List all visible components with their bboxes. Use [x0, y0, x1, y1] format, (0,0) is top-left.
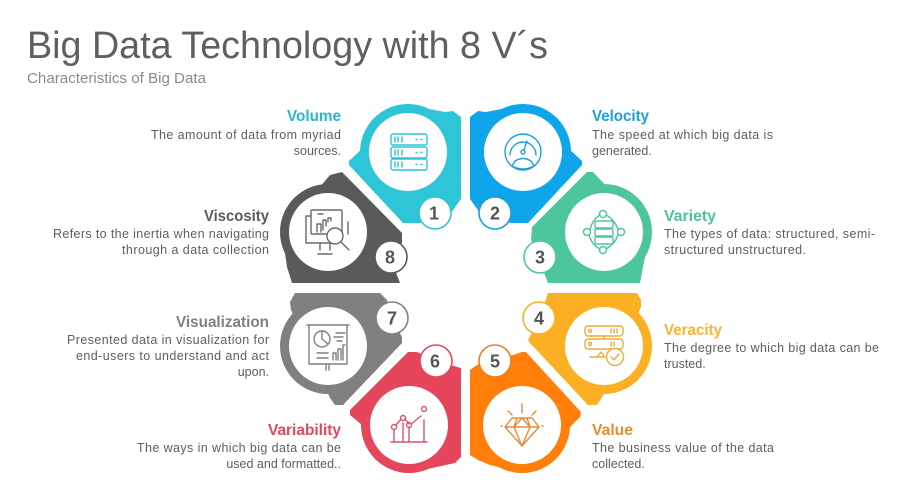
- panel: viscosity: [280, 172, 407, 283]
- text: volume: The amount of data from myriad: [151, 128, 341, 142]
- text: veracity: The degree to which big data can be: [664, 341, 879, 355]
- text: variety: [664, 208, 875, 257]
- panel: volume: 1: [429, 204, 439, 224]
- panel: visualization: 7: [387, 308, 397, 328]
- text: visualization: upon.: [238, 365, 269, 379]
- panel: variability: [350, 345, 461, 473]
- text: value: The business value of the data: [592, 441, 774, 455]
- text: variability: [137, 422, 341, 471]
- panel: volume: [349, 104, 461, 229]
- text: variability: Variability: [268, 422, 341, 439]
- icon: server stack: [391, 134, 427, 170]
- text: velocity: Velocity: [592, 108, 649, 125]
- text: value: collected.: [592, 457, 645, 471]
- text: viscosity: [53, 208, 269, 257]
- panel: velocity: 2: [490, 204, 500, 224]
- panel: velocity: [470, 104, 582, 229]
- text: variety: structured unstructured.: [664, 243, 806, 257]
- subtitle: Characteristics of Big Data: [27, 71, 207, 87]
- text: visualization: [67, 314, 270, 379]
- text: veracity: trusted.: [664, 357, 706, 371]
- panel: visualization: [280, 293, 408, 405]
- icon: line chart: [391, 406, 427, 442]
- icon: server check: [585, 326, 624, 366]
- text: value: [592, 422, 774, 471]
- icon: connected database: [584, 210, 624, 254]
- panel: variability: 6: [430, 352, 440, 372]
- icon: presentation board: [307, 325, 349, 370]
- text: volume: sources.: [294, 144, 341, 158]
- text: variability: used and formatted..: [226, 457, 341, 471]
- text: variety: The types of data: structured, semi-: [664, 227, 875, 241]
- text: visualization: Visualization: [176, 314, 269, 331]
- icon: monitor with magnifier: [306, 210, 349, 254]
- title: Big Data Technology with 8 V´s: [27, 25, 548, 67]
- text: veracity: [664, 322, 879, 371]
- text: viscosity: Refers to the inertia when navigating: [53, 227, 269, 241]
- text: viscosity: through a data collection: [122, 243, 269, 257]
- panel: variety: [524, 172, 652, 283]
- text: volume: [151, 108, 341, 158]
- text: viscosity: Viscosity: [204, 208, 269, 225]
- text: velocity: generated.: [592, 144, 652, 158]
- text: visualization: Presented data in visualization for: [67, 333, 269, 347]
- panel: variety: 3: [535, 248, 545, 268]
- panel: veracity: [523, 293, 652, 405]
- text: variability: The ways in which big data can be: [137, 441, 341, 455]
- panel: veracity: 4: [534, 308, 544, 328]
- icon: speedometer: [505, 134, 541, 170]
- text: volume: Volume: [287, 108, 341, 125]
- panel: value: [470, 345, 581, 473]
- text: velocity: The speed at which big data is: [592, 128, 773, 142]
- text: veracity: Veracity: [664, 322, 722, 339]
- panel: viscosity: 8: [385, 248, 395, 268]
- panel: value: 5: [490, 352, 500, 372]
- icon: diamond: [501, 404, 543, 446]
- text: visualization: end-users to understand and act: [76, 349, 270, 363]
- text: variety: Variety: [664, 208, 716, 225]
- text: velocity: [592, 108, 773, 158]
- text: value: Value: [592, 422, 633, 439]
